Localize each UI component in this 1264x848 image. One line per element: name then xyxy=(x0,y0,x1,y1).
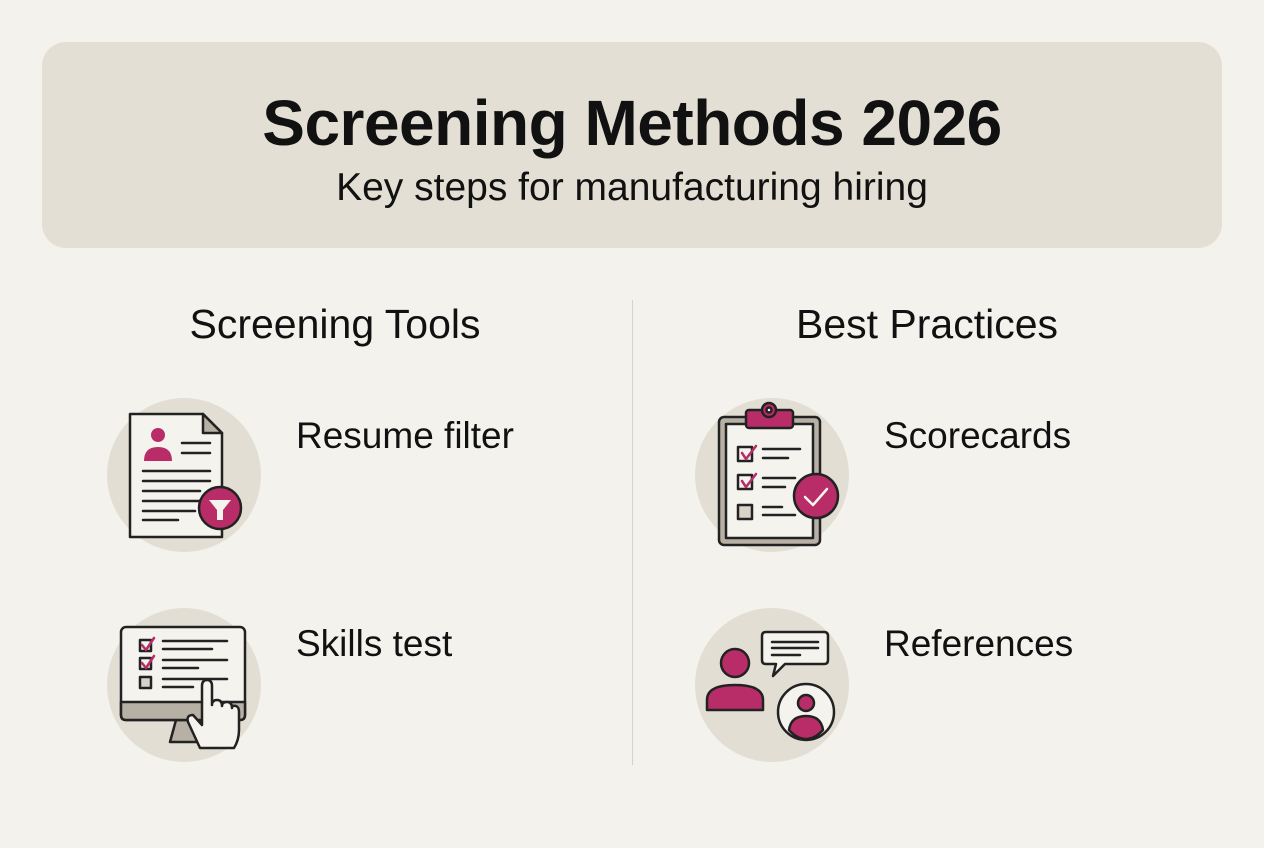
icon: resume filter xyxy=(107,398,261,552)
icon: references xyxy=(695,608,849,762)
icon: skills test xyxy=(107,608,261,762)
divider xyxy=(632,300,633,765)
icon: scorecards clipboard xyxy=(695,398,849,552)
title: Screening Methods 2026 xyxy=(262,87,1002,159)
subtitle: Key steps for manufacturing hiring xyxy=(336,166,928,209)
label: Skills test: Skills test xyxy=(296,623,452,664)
label: References: References xyxy=(884,623,1073,664)
label: Scorecards: Scorecards xyxy=(884,415,1071,456)
header banner xyxy=(42,42,1222,248)
heading: Best Practices: Best Practices xyxy=(796,301,1058,347)
heading: Screening Tools: Screening Tools xyxy=(190,301,480,347)
label: Resume filter: Resume filter xyxy=(296,415,514,456)
